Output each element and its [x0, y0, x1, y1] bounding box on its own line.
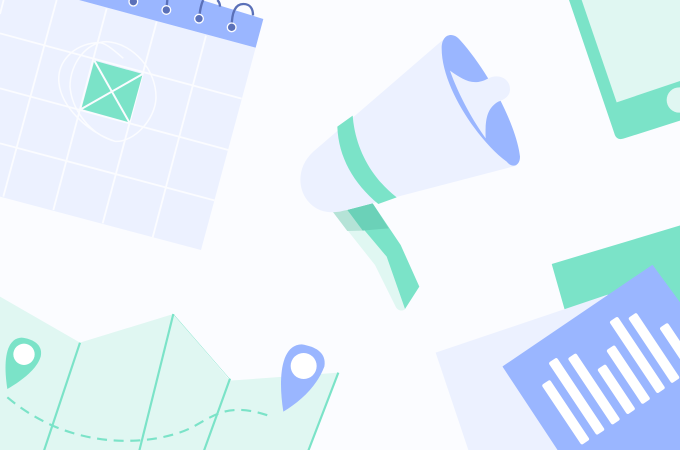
megaphone mouth: [442, 35, 520, 166]
megaphone green band: [337, 116, 397, 204]
calendar: [0, 0, 263, 250]
icon: green map pin: [6, 338, 41, 389]
highlighted date: [81, 61, 143, 122]
icon: blue map pin: [281, 344, 325, 412]
map: [0, 297, 338, 450]
green document: [552, 226, 680, 327]
calendar header band: [79, 0, 263, 48]
tablet screen: [582, 0, 680, 102]
binder rings: [129, 0, 253, 32]
documents with bar chart: [436, 226, 680, 450]
megaphone: [300, 35, 520, 311]
calendar page: [0, 0, 256, 250]
hand-drawn circle: [59, 42, 156, 141]
megaphone inner cone: [450, 71, 510, 138]
dashed route: [7, 397, 272, 441]
tablet body: [569, 0, 680, 139]
bar chart: [542, 313, 680, 445]
megaphone body: [300, 40, 517, 212]
megaphone handle shadow: [333, 210, 405, 311]
blue document: [503, 266, 680, 450]
tablet: [569, 0, 680, 139]
map sheet: [0, 297, 338, 450]
tablet home button: [667, 87, 680, 113]
megaphone handle: [347, 203, 419, 309]
light document: [436, 295, 630, 450]
handle overlap shading: [333, 203, 389, 231]
